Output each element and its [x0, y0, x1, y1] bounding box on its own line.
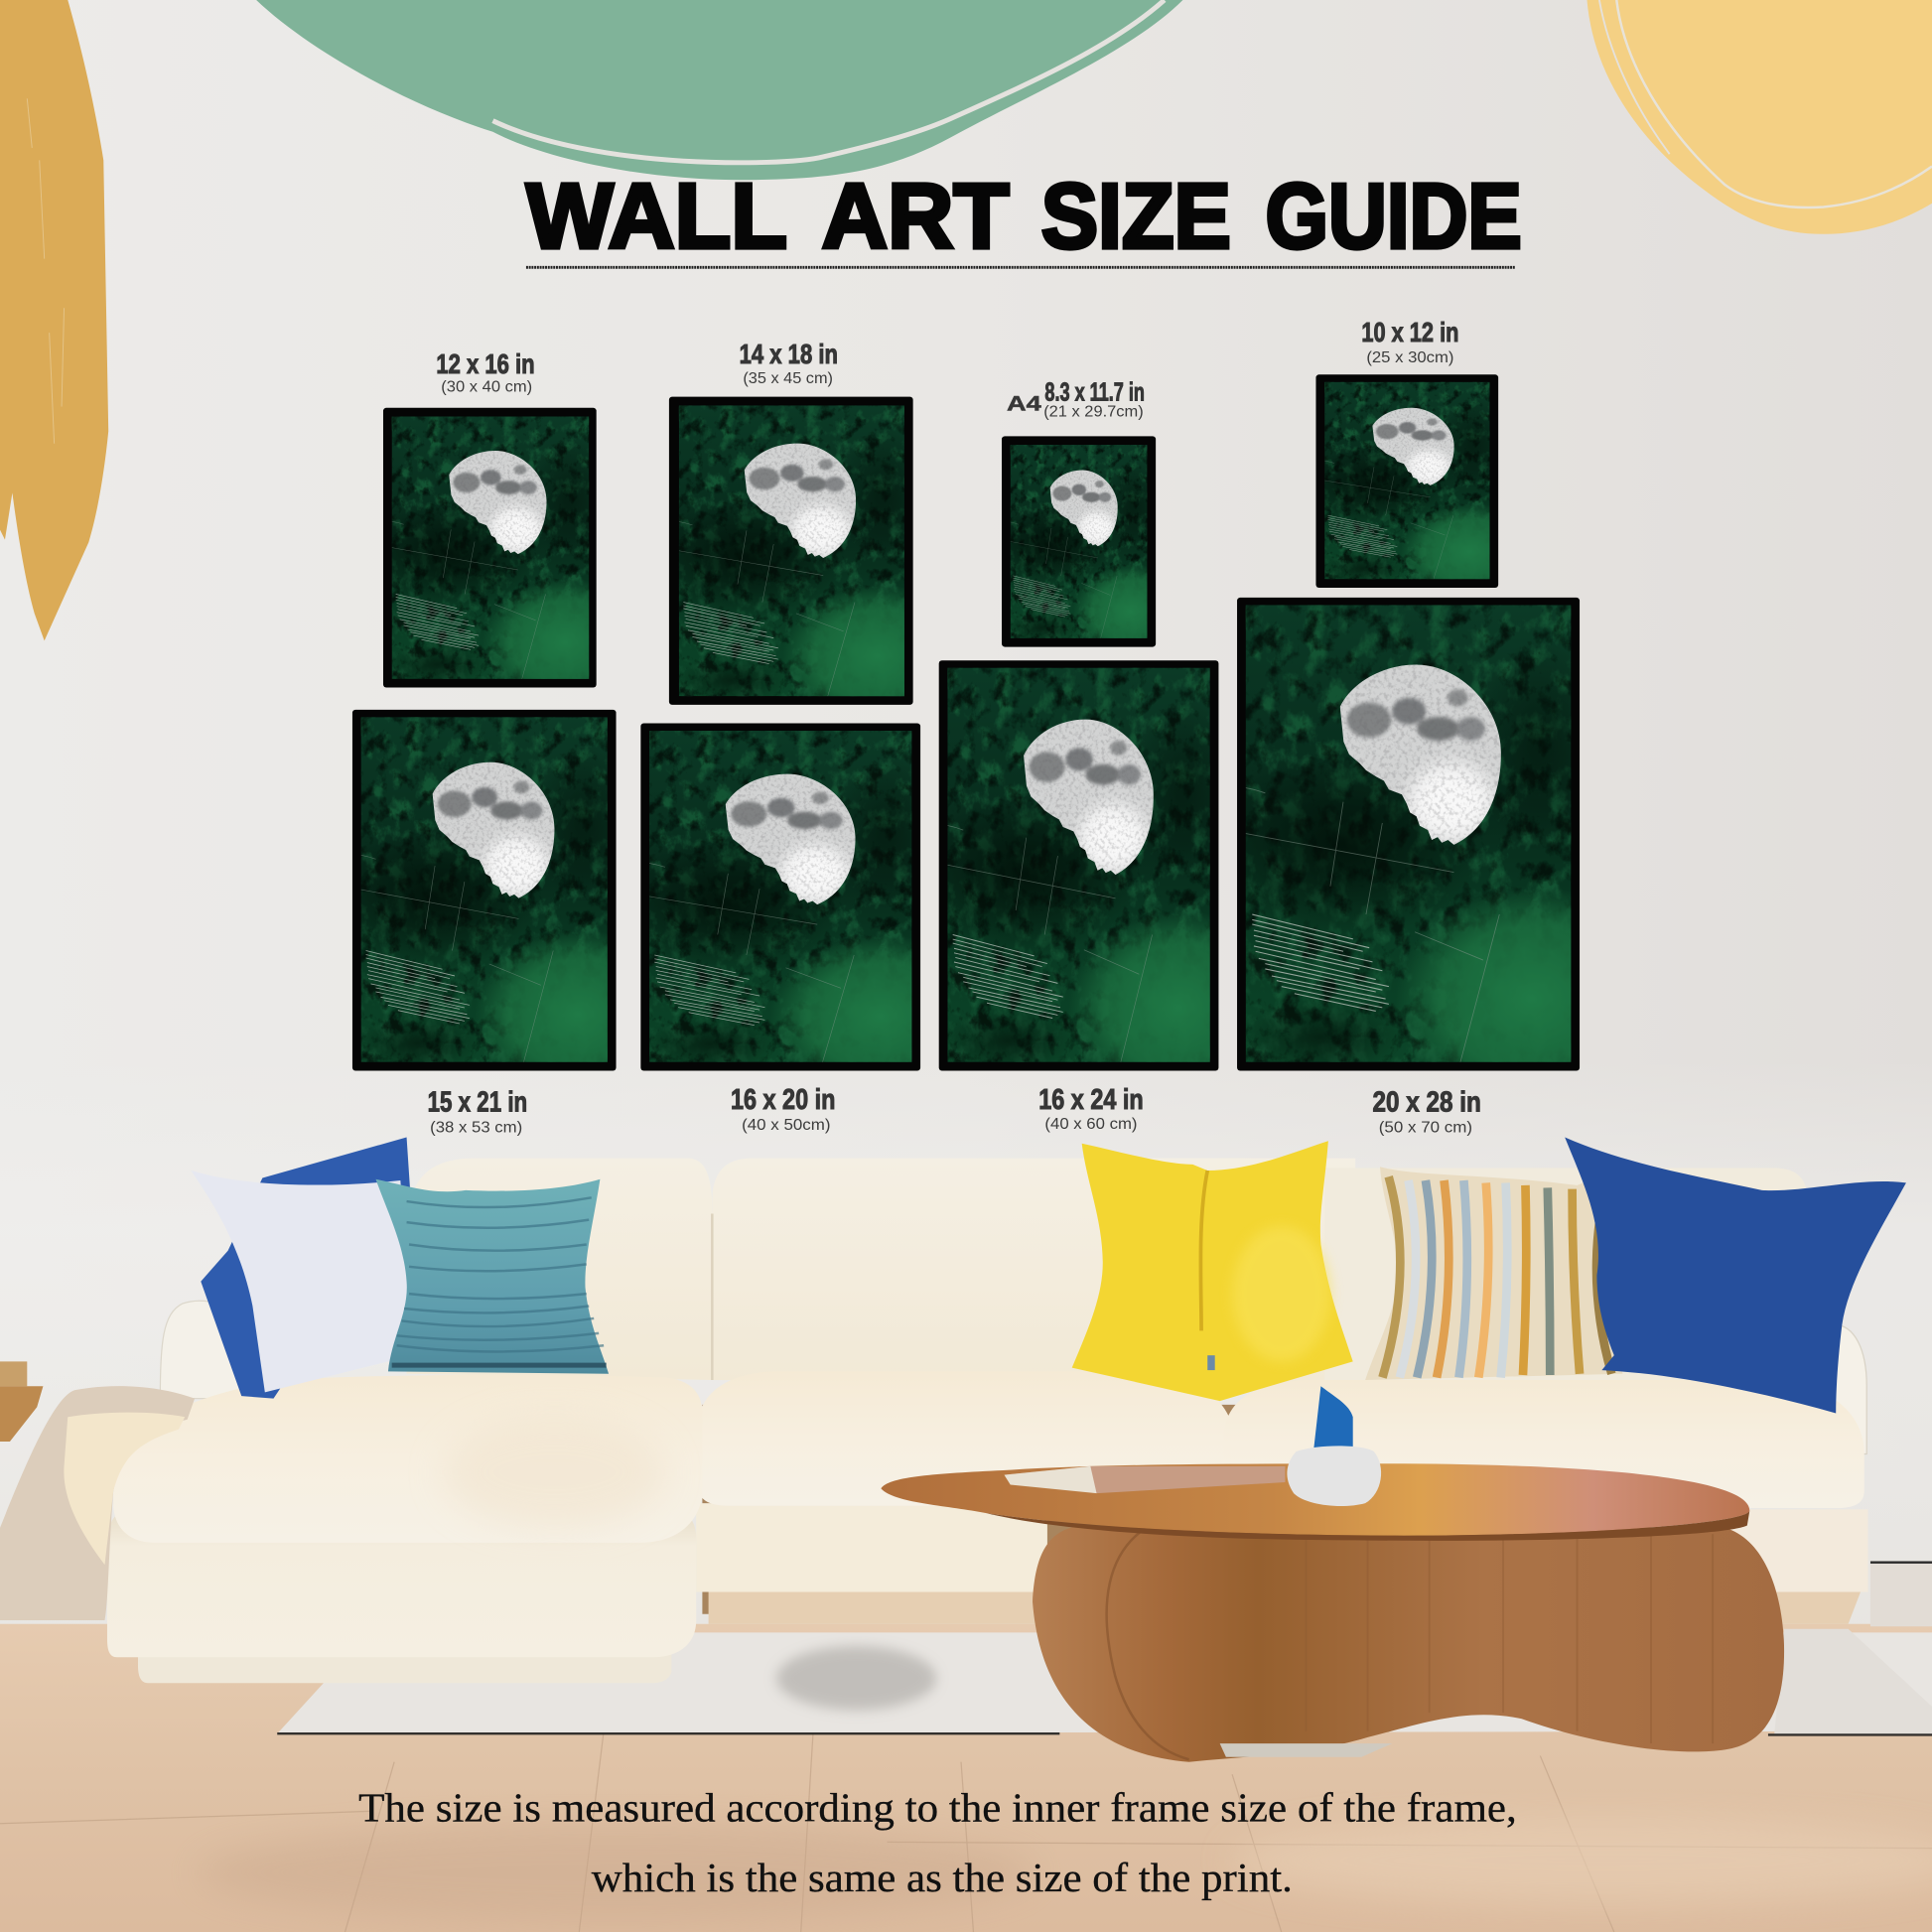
label 12 x 16 in: 12 x 16 in — [436, 348, 535, 379]
label 12 x 16 in — [436, 348, 535, 396]
label 20 x 28 in: (50 x 70 cm) — [1379, 1120, 1472, 1137]
decorative yellow brush circle — [1587, 0, 1932, 234]
right sofa arm — [1824, 1324, 1866, 1453]
poster 15 x 21 in — [329, 710, 681, 1099]
label 15 x 21 in: 15 x 21 in — [428, 1086, 527, 1118]
label 14 x 18 in — [740, 339, 838, 387]
pillow: back blue right — [1565, 1138, 1906, 1414]
decorative green semicircle — [256, 0, 1182, 180]
title: ART — [822, 164, 1009, 267]
label 15 x 21 in: (38 x 53 cm) — [430, 1120, 522, 1137]
poster A4 — [993, 436, 1188, 659]
pillow: back blue left — [201, 1138, 410, 1399]
title underline — [526, 266, 1516, 269]
title: SIZE — [1041, 164, 1231, 267]
pillow: yellow — [1072, 1141, 1353, 1401]
label 10 x 12 in: (25 x 30cm) — [1366, 349, 1453, 366]
footnote — [358, 1785, 1517, 1900]
title — [526, 164, 1522, 267]
label A4 8.3 x 11.7 in: A4 — [1007, 392, 1041, 415]
footnote: which is the same as the size of the print. — [592, 1856, 1293, 1900]
label A4 8.3 x 11.7 in — [1007, 376, 1145, 420]
label 14 x 18 in: (35 x 45 cm) — [743, 370, 833, 387]
rug — [277, 1629, 1932, 1734]
label A4 8.3 x 11.7 in: 8.3 x 11.7 in — [1044, 376, 1145, 406]
label 16 x 24 in: 16 x 24 in — [1038, 1084, 1144, 1116]
label 15 x 21 in — [428, 1086, 527, 1137]
pillow: teal striped — [376, 1179, 609, 1374]
blanket — [0, 1386, 195, 1620]
label 16 x 24 in: (40 x 60 cm) — [1044, 1116, 1138, 1133]
label A4 8.3 x 11.7 in: (21 x 29.7cm) — [1043, 403, 1144, 420]
side table and books — [0, 1361, 43, 1442]
table top — [881, 1463, 1749, 1536]
pillow: striped — [1365, 1167, 1622, 1380]
pillow: white — [191, 1171, 413, 1392]
label 12 x 16 in: (30 x 40 cm) — [441, 379, 532, 396]
label 10 x 12 in — [1361, 317, 1458, 366]
decorative ochre brush stroke — [0, 0, 108, 640]
poster 10 x 12 in — [1304, 374, 1539, 601]
label 16 x 24 in — [1038, 1084, 1144, 1133]
label 20 x 28 in — [1373, 1086, 1481, 1137]
poster 16 x 20 in — [616, 724, 991, 1098]
title: WALL — [526, 164, 787, 267]
label 16 x 20 in: (40 x 50cm) — [742, 1117, 830, 1134]
title: GUIDE — [1266, 164, 1522, 267]
sofa — [107, 1159, 1867, 1683]
label 16 x 20 in: 16 x 20 in — [731, 1084, 835, 1116]
label 16 x 20 in — [731, 1084, 835, 1134]
poster 20 x 28 in — [1203, 598, 1669, 1111]
label 20 x 28 in: 20 x 28 in — [1373, 1086, 1481, 1118]
poster 12 x 16 in — [366, 408, 648, 707]
label 14 x 18 in: 14 x 18 in — [740, 339, 838, 369]
poster 14 x 18 in — [649, 397, 972, 728]
floor — [0, 1563, 1932, 1932]
table base — [1033, 1525, 1784, 1762]
poster 16 x 24 in — [913, 660, 1289, 1105]
vase with blue ornament — [1287, 1386, 1381, 1506]
coffee table — [881, 1463, 1784, 1762]
footnote: The size is measured according to the inner frame size of the frame, — [358, 1785, 1517, 1830]
book — [1004, 1466, 1285, 1493]
label 10 x 12 in: 10 x 12 in — [1361, 317, 1458, 347]
